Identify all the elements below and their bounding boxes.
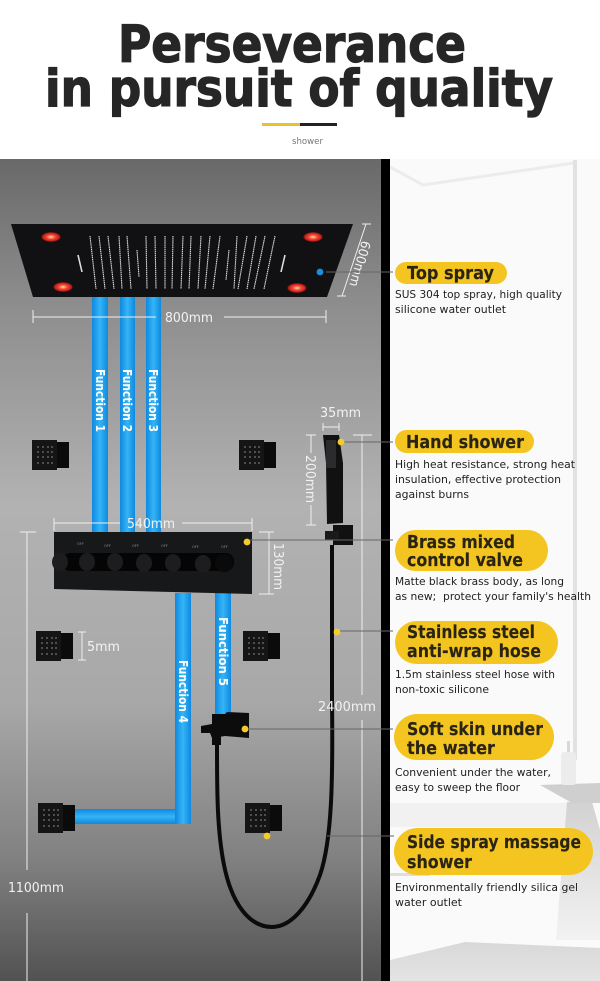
control valve	[52, 532, 252, 594]
callout: top spray: silicone water outlet	[395, 303, 507, 316]
black divider column	[381, 159, 390, 981]
callout: brass mixed control valve: control valve	[407, 550, 523, 571]
dimension: 5mm	[78, 632, 120, 660]
callout: soft skin: Convenient under the water,	[395, 766, 551, 779]
dimension: 540mm: 540mm	[127, 517, 175, 532]
hand shower	[323, 435, 353, 545]
callout: stainless steel hose	[395, 621, 558, 696]
LED lights	[41, 232, 323, 293]
callout: side spray: shower	[407, 852, 472, 873]
pipes: functions 1 to 3	[92, 296, 161, 533]
callout: hand shower: Hand shower	[406, 432, 524, 453]
panel: bathroom background	[390, 159, 600, 981]
pipes: functions 4 and 5	[75, 593, 231, 824]
callout: hand shower: High heat resistance, strong heat	[395, 458, 576, 471]
dimension: 130mm	[259, 532, 285, 594]
valve labels: OFF	[77, 542, 84, 546]
dimension: 35mm	[320, 406, 361, 431]
valve labels: OFF	[104, 544, 111, 548]
dimension: 130mm: 130mm	[270, 543, 285, 590]
dimension: 600mm	[337, 224, 373, 296]
dimension: 200mm: 200mm	[302, 455, 317, 503]
title: Perseverance	[118, 16, 466, 75]
dimension: 200mm	[302, 435, 317, 525]
title underline	[262, 123, 337, 126]
diverter outlet	[201, 712, 249, 745]
side spray jets	[32, 440, 282, 833]
marker dots	[242, 269, 344, 839]
valve knobs	[52, 553, 234, 573]
side slits	[78, 255, 285, 272]
valve labels	[77, 542, 228, 549]
dimension: 2400mm: 2400mm	[318, 700, 376, 715]
dimension: 35mm: 35mm	[320, 406, 361, 421]
callout: brass mixed control valve: Matte black brass body, as long	[395, 575, 564, 588]
hose	[217, 545, 332, 927]
subtitle: shower	[292, 137, 323, 147]
callout: hand shower	[395, 430, 576, 501]
pipes: functions 1 to 3: Function 3	[146, 369, 160, 432]
callout: stainless steel hose: Stainless steel	[407, 622, 535, 643]
dimension: 5mm: 5mm	[87, 640, 120, 655]
callout: brass mixed control valve	[395, 530, 591, 603]
callout: side spray: Environmentally friendly silica gel	[395, 881, 578, 894]
dimension: 1100mm: 1100mm	[8, 881, 64, 896]
spray nozzle lines	[90, 236, 275, 289]
pipes: functions 4 and 5: Function 5	[216, 617, 230, 686]
leader lines	[248, 272, 394, 836]
callout: soft skin: easy to sweep the floor	[395, 781, 520, 794]
valve labels: OFF	[132, 544, 139, 548]
callout: brass mixed control valve: Brass mixed	[407, 532, 515, 553]
callout: soft skin	[394, 714, 554, 794]
callout: top spray: Top spray	[407, 263, 494, 284]
callout: side spray: water outlet	[395, 896, 463, 909]
callout: soft skin: Soft skin under	[407, 719, 543, 740]
pipes: functions 1 to 3: Function 1	[93, 369, 107, 432]
callout: soft skin: the water	[407, 738, 495, 759]
callout: brass mixed control valve: as new; protect your family's health	[395, 590, 591, 603]
dimension: 800mm: 800mm	[165, 311, 213, 326]
valve labels: OFF	[192, 545, 199, 549]
callout: hand shower: against burns	[395, 488, 469, 501]
pipes: functions 4 and 5: Function 4	[176, 660, 190, 723]
callout: top spray: SUS 304 top spray, high quality	[395, 288, 562, 301]
callout: hand shower: insulation, effective protection	[395, 473, 561, 486]
top spray panel	[11, 224, 353, 297]
callout: stainless steel hose: non-toxic silicone	[395, 683, 489, 696]
dimension: 600mm: 600mm	[345, 239, 373, 288]
valve labels: OFF	[161, 544, 168, 548]
callout: stainless steel hose: 1.5m stainless steel hose with	[395, 668, 555, 681]
callout: side spray	[394, 828, 593, 909]
callout: stainless steel hose: anti-wrap hose	[407, 641, 541, 662]
pipes: functions 1 to 3: Function 2	[120, 369, 134, 432]
callout: top spray	[395, 262, 562, 316]
panel: product diagram background	[0, 159, 381, 981]
valve labels: OFF	[221, 545, 228, 549]
title: in pursuit of quality	[45, 60, 553, 119]
title	[45, 16, 553, 119]
